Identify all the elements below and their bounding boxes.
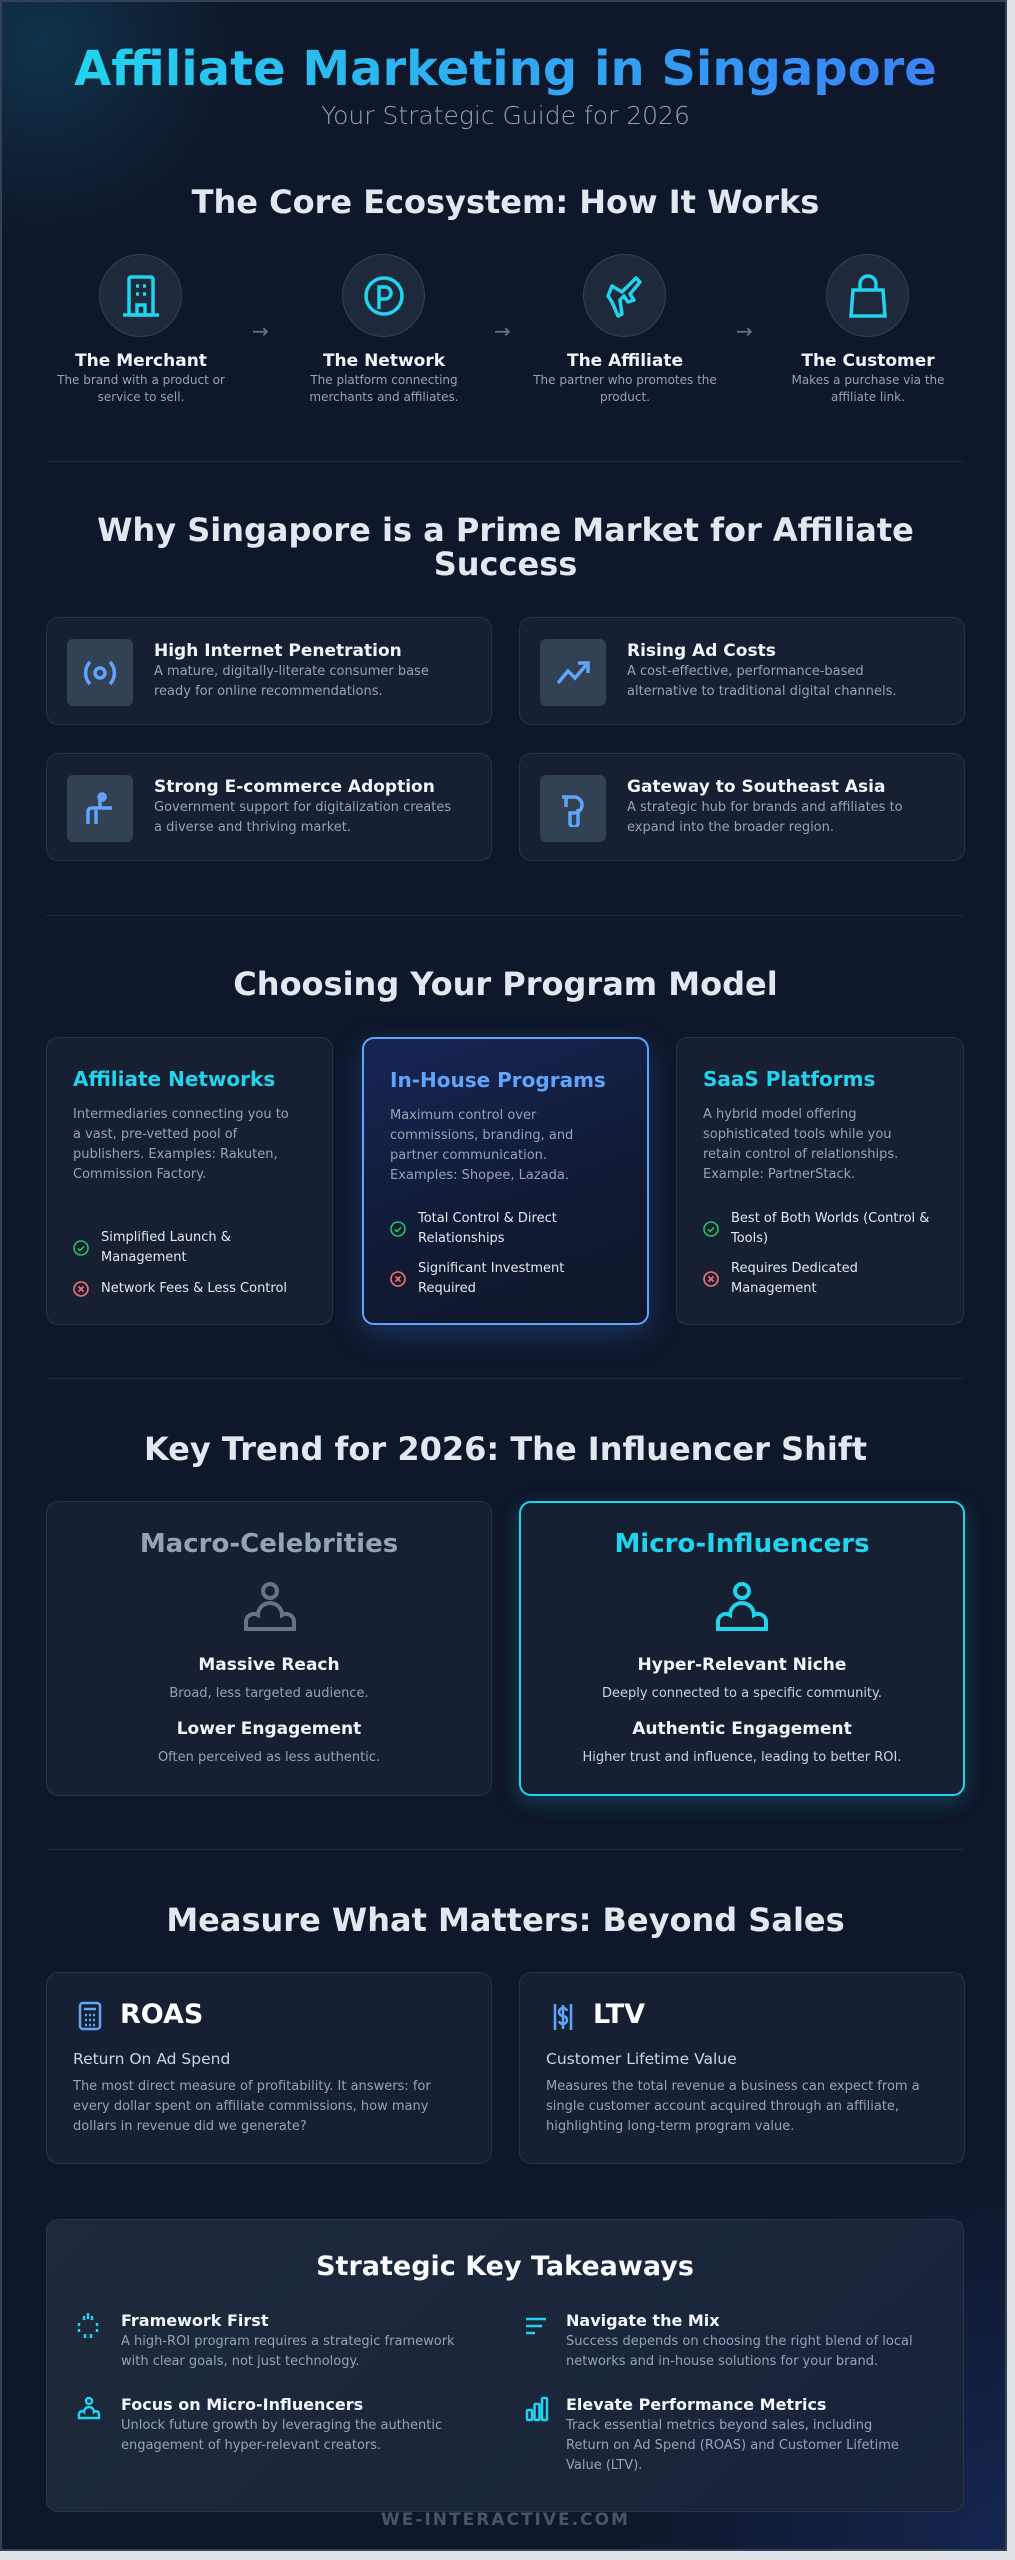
con: Requires Dedicated	[731, 1261, 858, 1276]
ecosystem flow: The partner who promotes the product.	[533, 373, 717, 404]
card: roas: every dollar spent on affiliate commissions, how many	[73, 2099, 428, 2114]
icon: gateway	[540, 775, 606, 842]
card: saas: sophisticated tools while you	[703, 1127, 892, 1142]
card: macro: Macro-Celebrities	[140, 1529, 398, 1559]
pro	[703, 1211, 929, 1246]
heading: influencer shift: Key Trend for 2026: The Influencer Shift	[144, 1430, 867, 1468]
ecosystem flow: The Affiliate	[567, 351, 683, 371]
con: Required	[418, 1281, 476, 1296]
card: ltv: highlighting long-term program value.	[546, 2119, 794, 2134]
heading: why singapore	[97, 511, 914, 583]
panel: takeaways	[46, 2219, 964, 2512]
pro: Best of Both Worlds (Control &	[731, 1211, 929, 1226]
con	[703, 1261, 858, 1296]
pro: Tools)	[731, 1231, 768, 1246]
card: ad costs: A cost-effective, performance-based	[627, 664, 864, 679]
icon: ecommerce	[67, 775, 133, 842]
panel: takeaways: Focus on Micro-Influencers	[121, 2395, 363, 2414]
card: saas: retain control of relationships.	[703, 1147, 898, 1162]
arrow: →	[736, 319, 753, 343]
panel: takeaways: Value (LTV).	[566, 2458, 642, 2473]
takeaway: micro-influencers	[78, 2395, 442, 2453]
pro: Total Control & Direct	[418, 1211, 557, 1226]
takeaway: framework	[78, 2311, 455, 2369]
card: roas: ROAS	[120, 1999, 203, 2030]
pro: Management	[101, 1250, 187, 1265]
card: in-house: In-House Programs	[390, 1068, 606, 1092]
card: ltv: single customer account acquired through an affiliate,	[546, 2099, 899, 2114]
arrow: →	[252, 319, 269, 343]
card: affiliate networks: publishers. Examples: Rakuten,	[73, 1147, 278, 1162]
takeaway: metrics	[526, 2395, 899, 2473]
card: macro: Massive Reach	[198, 1655, 340, 1675]
pro	[73, 1230, 231, 1265]
card: macro: Lower Engagement	[177, 1719, 361, 1739]
card: ecommerce	[46, 753, 492, 861]
heading: why singapore: Why Singapore is a Prime Market for Affiliate	[97, 511, 914, 549]
card: saas: SaaS Platforms	[703, 1067, 875, 1091]
ecosystem flow	[57, 254, 945, 404]
card: ecommerce: Government support for digitalization creates	[154, 800, 451, 815]
card: roas: Return On Ad Spend	[73, 2050, 230, 2068]
card: ecommerce: a diverse and thriving market.	[154, 820, 351, 835]
panel: takeaways: Track essential metrics beyond sales, including	[566, 2418, 872, 2433]
card: ad costs: alternative to traditional digital channels.	[627, 684, 896, 699]
step labels: The brand with a product or service to sell.	[57, 373, 225, 404]
panel: takeaways: Navigate the Mix	[566, 2311, 720, 2330]
card: affiliate networks: Intermediaries connecting you to	[73, 1107, 289, 1122]
card: ecommerce: Strong E-commerce Adoption	[154, 777, 435, 797]
con	[390, 1261, 564, 1296]
panel: takeaways: Framework First	[121, 2311, 268, 2330]
card: roas: The most direct measure of profitability. It answers: for	[73, 2079, 431, 2094]
card: affiliate networks: a vast, pre-vetted pool of	[73, 1127, 237, 1142]
panel: takeaways: A high-ROI program requires a strategic framework	[121, 2334, 455, 2349]
heading: measure: Measure What Matters: Beyond Sales	[166, 1901, 845, 1939]
arrow: →	[494, 319, 511, 343]
icon: merchant building	[99, 254, 182, 337]
card: ltv: LTV	[593, 1999, 645, 2030]
card: micro: Higher trust and influence, leading to better ROI.	[583, 1750, 901, 1765]
icon: network	[342, 254, 425, 337]
icon: signal	[67, 639, 133, 706]
card: ltv: Measures the total revenue a business can expect from a	[546, 2079, 920, 2094]
card: in-house	[362, 1037, 649, 1325]
ecosystem flow: The platform connecting merchants and affiliates.	[309, 373, 459, 404]
card: micro: Authentic Engagement	[632, 1719, 852, 1739]
ecosystem flow: The Customer	[801, 351, 935, 371]
card: macro: Broad, less targeted audience.	[169, 1686, 369, 1701]
card: affiliate networks: Affiliate Networks	[73, 1067, 275, 1091]
title: Affiliate Marketing in Singapore	[74, 41, 937, 97]
ecosystem flow: The Network	[323, 351, 445, 371]
card: macro: Often perceived as less authentic.	[158, 1750, 380, 1765]
pro	[390, 1211, 557, 1246]
step labels: The Merchant	[75, 351, 207, 371]
panel: takeaways: with clear goals, not just technology.	[121, 2354, 359, 2369]
card: in-house: Maximum control over	[390, 1108, 536, 1123]
card: macro	[46, 1501, 492, 1796]
panel: takeaways: Success depends on choosing the right blend of local	[566, 2334, 913, 2349]
card: roas	[46, 1972, 492, 2164]
card: gateway: Gateway to Southeast Asia	[627, 777, 885, 797]
footer: WE-INTERACTIVE.COM	[381, 2510, 630, 2530]
card: roas: dollars in revenue did we generate?	[73, 2119, 307, 2134]
card: internet: High Internet Penetration	[154, 641, 402, 661]
card: saas	[676, 1037, 964, 1325]
subtitle: Your Strategic Guide for 2026	[321, 101, 690, 130]
con: Significant Investment	[418, 1261, 564, 1276]
con: Management	[731, 1281, 817, 1296]
card: internet: A mature, digitally-literate consumer base	[154, 664, 429, 679]
card: ad costs: Rising Ad Costs	[627, 641, 776, 661]
step labels	[57, 351, 225, 404]
pro: Simplified Launch &	[101, 1230, 231, 1245]
card: saas: Example: PartnerStack.	[703, 1167, 855, 1182]
card: ltv	[519, 1972, 965, 2164]
con: Network Fees & Less Control	[101, 1281, 287, 1296]
card: gateway	[519, 753, 965, 861]
heading: core ecosystem: The Core Ecosystem: How It Works	[192, 183, 819, 221]
card: internet: ready for online recommendations.	[154, 684, 383, 699]
icon: person	[244, 1582, 296, 1631]
panel: takeaways: Strategic Key Takeaways	[316, 2251, 694, 2282]
pro: Relationships	[418, 1231, 505, 1246]
icon: person	[716, 1582, 768, 1631]
card: in-house: Examples: Shopee, Lazada.	[390, 1168, 569, 1183]
card: ltv: Customer Lifetime Value	[546, 2050, 737, 2068]
panel: takeaways: Elevate Performance Metrics	[566, 2395, 826, 2414]
card: micro	[519, 1501, 965, 1796]
card: ad costs	[519, 617, 965, 725]
icon: affiliate	[583, 254, 666, 337]
card: saas: A hybrid model offering	[703, 1107, 857, 1122]
card: affiliate networks: Commission Factory.	[73, 1167, 206, 1182]
card: micro: Micro-Influencers	[614, 1529, 870, 1559]
heading: program model: Choosing Your Program Model	[233, 965, 778, 1003]
takeaway: mix	[526, 2311, 913, 2369]
icon: calculator	[78, 2002, 102, 2030]
card: gateway: A strategic hub for brands and affiliates to	[627, 800, 903, 815]
card: gateway: expand into the broader region.	[627, 820, 834, 835]
icon: dollar	[554, 2004, 572, 2030]
heading: why singapore: Success	[434, 545, 577, 583]
card: in-house: commissions, branding, and	[390, 1128, 573, 1143]
card: micro: Deeply connected to a specific community.	[602, 1686, 882, 1701]
icon: customer bag	[826, 254, 909, 337]
card: internet	[46, 617, 492, 725]
panel: takeaways: Return on Ad Spend (ROAS) and Customer Lifetime	[566, 2438, 899, 2453]
card: in-house: partner communication.	[390, 1148, 547, 1163]
card: affiliate networks	[46, 1037, 333, 1325]
card: micro: Hyper-Relevant Niche	[638, 1655, 846, 1675]
ecosystem flow: Makes a purchase via the affiliate link.	[791, 373, 945, 404]
panel: takeaways: engagement of hyper-relevant creators.	[121, 2438, 381, 2453]
icon: trend	[540, 639, 606, 706]
panel: takeaways: networks and in-house solutions for your brand.	[566, 2354, 878, 2369]
panel: takeaways: Unlock future growth by leveraging the authentic	[121, 2418, 442, 2433]
